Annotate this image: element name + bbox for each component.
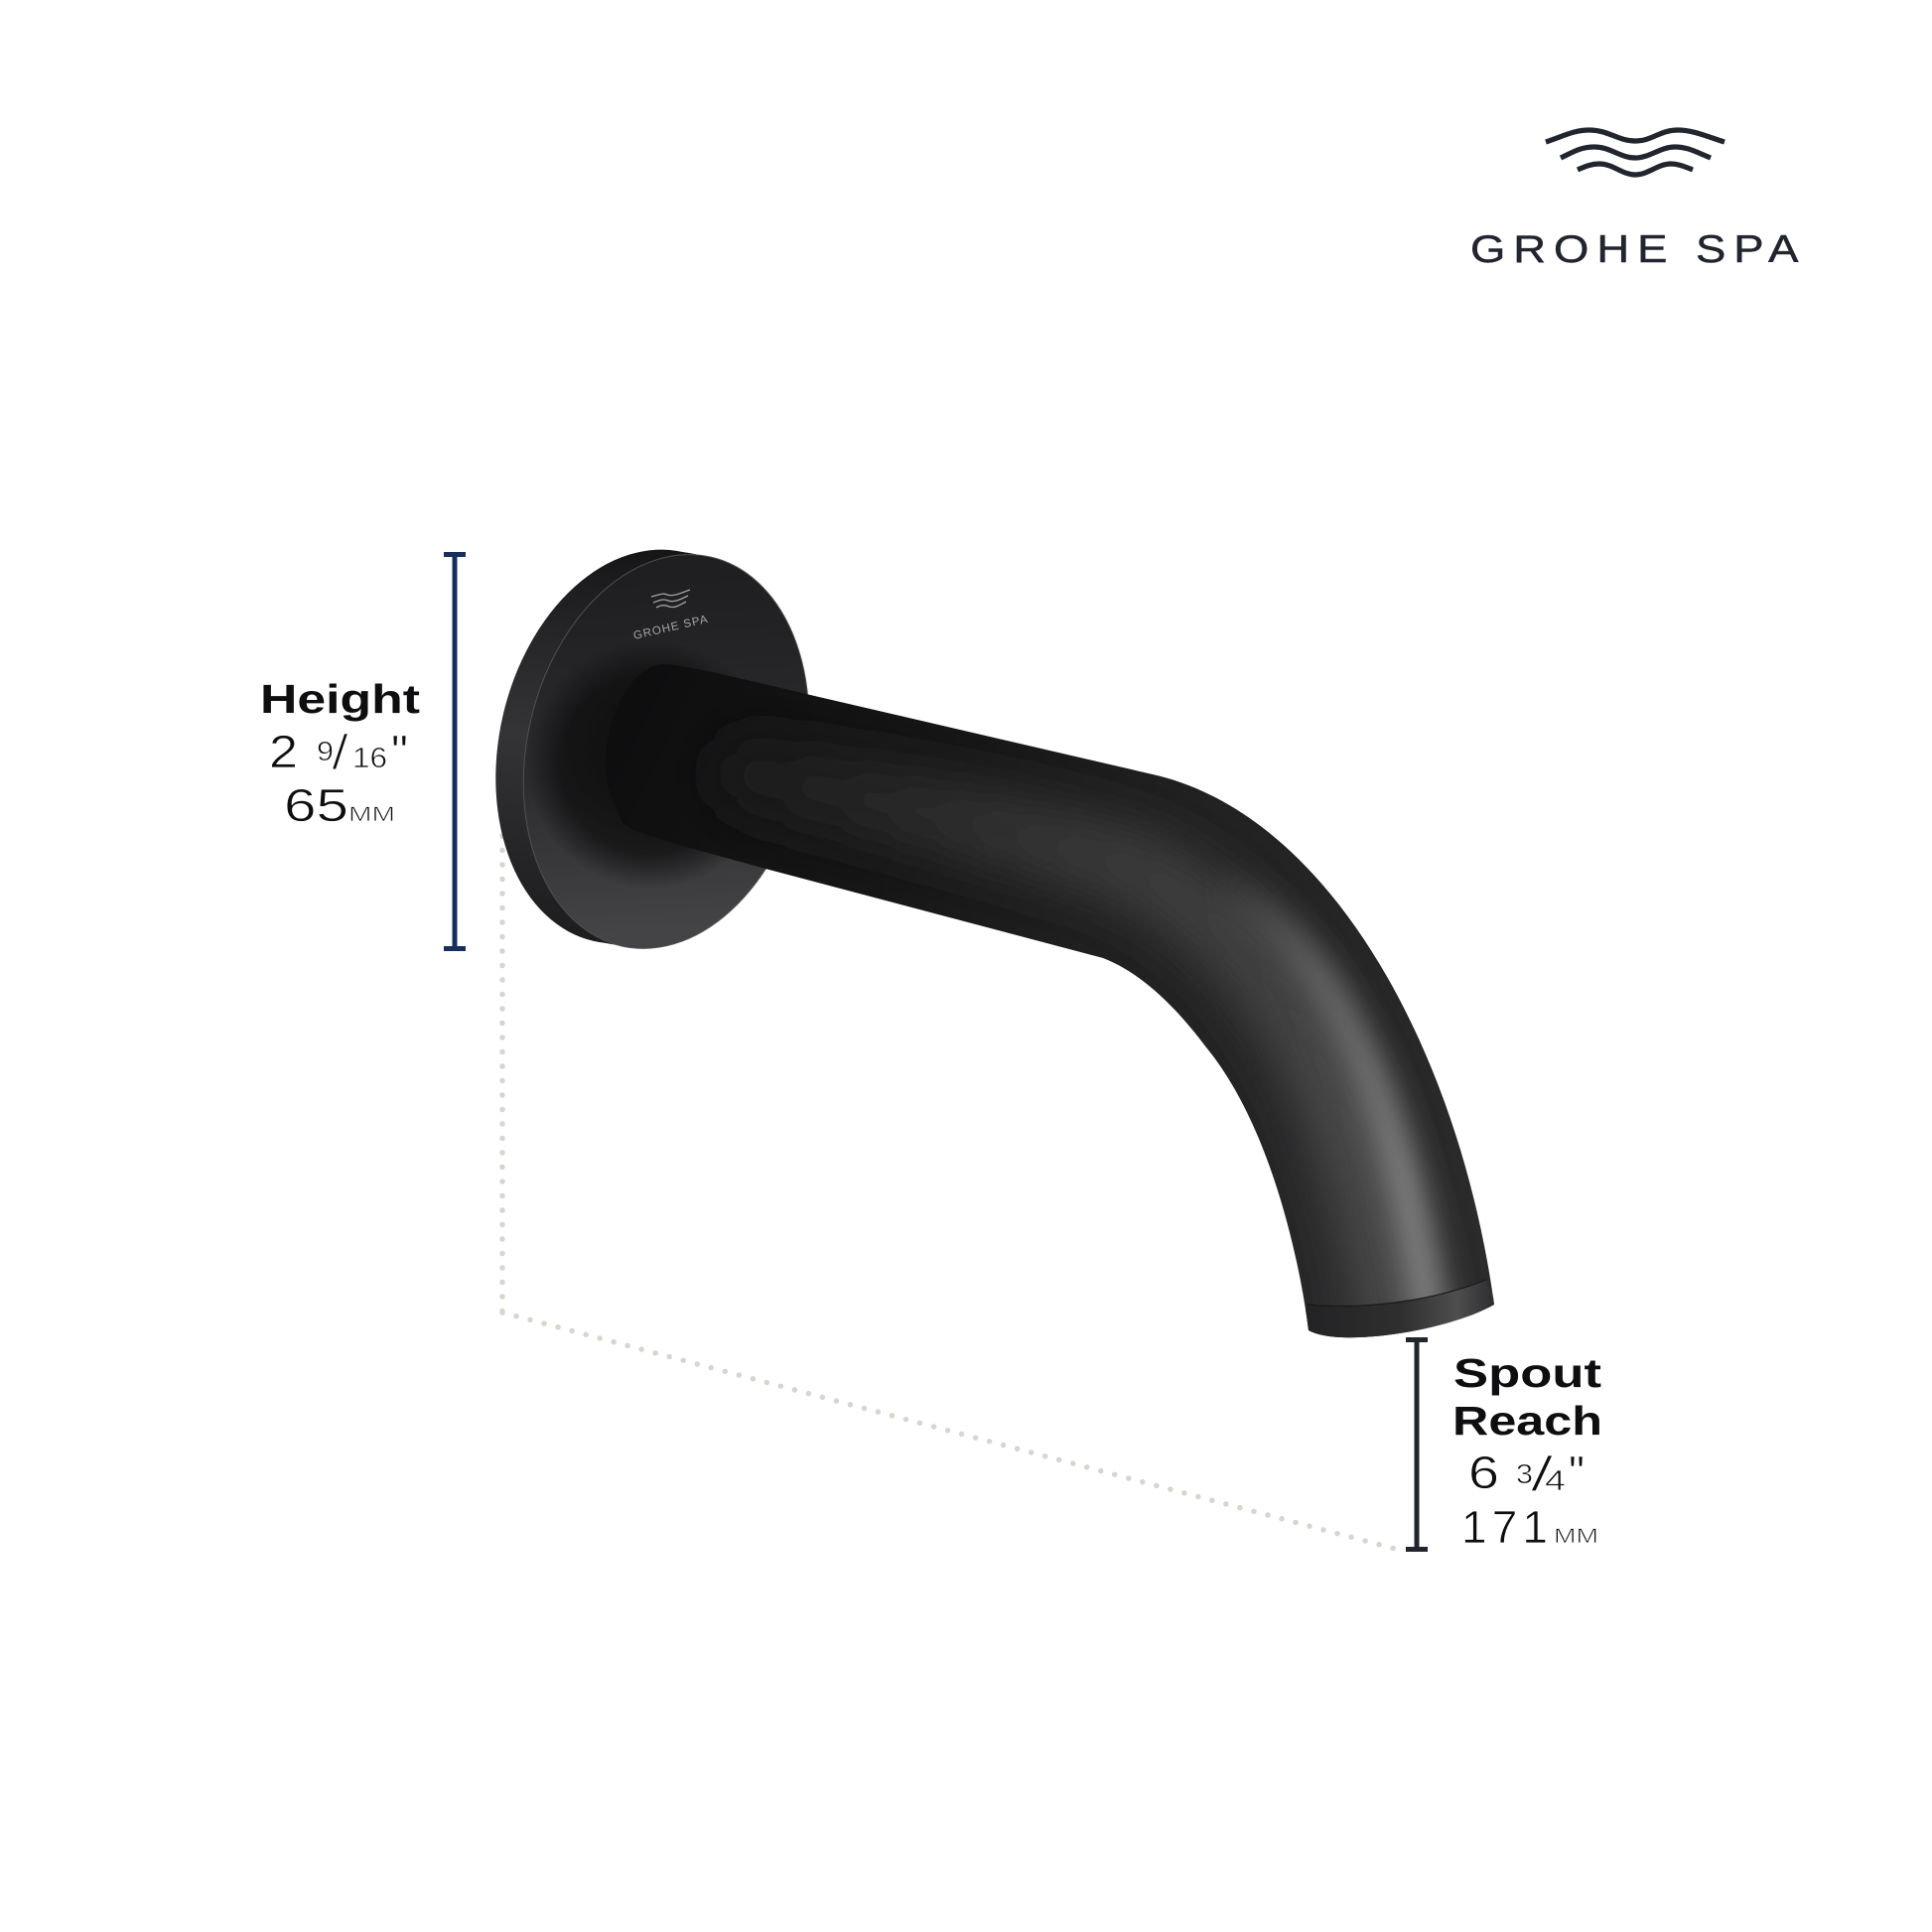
- spout reach label: [1452, 1350, 1602, 1553]
- plate engraved logo: [632, 590, 709, 642]
- spout tube: [645, 664, 1494, 1338]
- plate engraved logo: GROHE SPA: [632, 614, 709, 642]
- dotted reach guide: [502, 836, 1399, 1550]
- value: inches: ": [391, 726, 408, 777]
- value: inches: 16: [352, 743, 387, 774]
- value: inches: /: [332, 725, 348, 780]
- icon: logo waves: [1546, 130, 1725, 175]
- nozzle ring: [1305, 1281, 1494, 1338]
- value: inches: 3: [1516, 1458, 1533, 1489]
- escutcheon plate: [495, 550, 808, 949]
- value: inches: 2: [269, 726, 298, 777]
- value: inches: [1468, 1447, 1585, 1502]
- value: inches: ": [1569, 1447, 1585, 1498]
- value: inches: [269, 725, 408, 780]
- value: inches: 4: [1545, 1465, 1566, 1497]
- logo wordmark: GROHE SPA: [1470, 227, 1798, 270]
- heading: Spout Reach: Reach: [1452, 1398, 1602, 1444]
- value: millimetres: MM: [1554, 1525, 1598, 1548]
- value: millimetres: 171: [1461, 1501, 1548, 1553]
- value: inches: /: [1530, 1447, 1554, 1502]
- value: inches: 9: [317, 736, 334, 766]
- heading: Height: Height: [260, 676, 420, 722]
- heading: Spout Reach: [1452, 1350, 1602, 1444]
- height label: [260, 676, 420, 831]
- logo: Grohe Spa: [1470, 130, 1798, 270]
- value: millimetres: [1461, 1501, 1598, 1553]
- heading: Spout Reach: Spout: [1453, 1350, 1601, 1396]
- spout reach dimension bar: [1406, 1337, 1428, 1552]
- faucet spout: [495, 550, 1494, 1338]
- height dimension bar: [444, 552, 466, 951]
- value: inches: 6: [1468, 1447, 1499, 1498]
- value: millimetres: MM: [348, 803, 395, 826]
- value: millimetres: [284, 779, 395, 831]
- value: millimetres: 65: [284, 779, 348, 831]
